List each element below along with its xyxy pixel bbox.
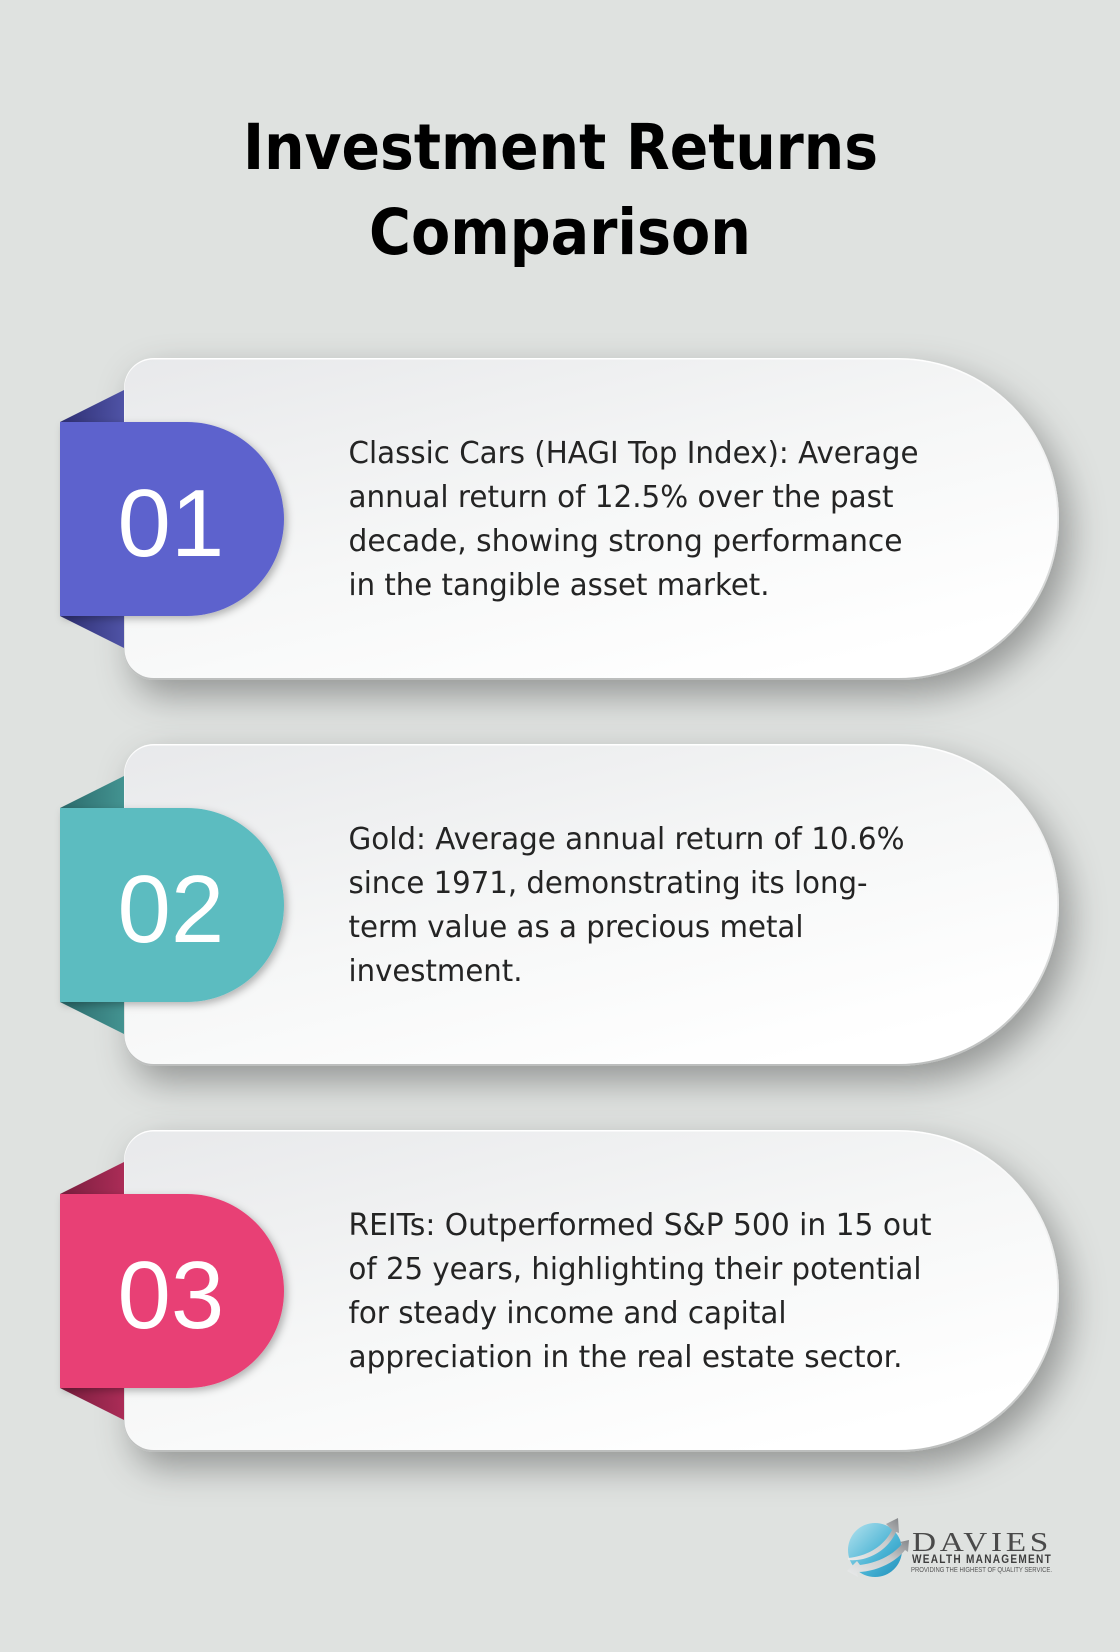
icon: globe with arrows	[847, 1518, 909, 1577]
panel: gold	[60, 744, 1059, 1066]
badge 1 ribbon folds	[60, 390, 124, 648]
text block 2: term value as a precious metal	[348, 910, 804, 945]
text block 2: since 1971, demonstrating its long-	[348, 866, 868, 901]
text block 3: REITs: Outperformed S&P 500 in 15 out	[348, 1208, 932, 1243]
panel: reits	[60, 1130, 1059, 1452]
text block 1: decade, showing strong performance	[348, 524, 902, 559]
title: Investment Returns	[243, 111, 878, 184]
text block 2: Gold: Average annual return of 10.6%	[348, 822, 904, 857]
badge 2 ribbon folds	[60, 776, 124, 1034]
text block 3: for steady income and capital	[348, 1296, 786, 1331]
text block 2: investment.	[348, 954, 522, 989]
text block 3: of 25 years, highlighting their potential	[348, 1252, 922, 1287]
badge 3	[60, 1194, 284, 1388]
number 03: 03	[118, 1242, 224, 1349]
badge 2	[60, 808, 284, 1002]
number 02: 02	[118, 856, 224, 963]
text block 1: annual return of 12.5% over the past	[348, 480, 894, 515]
text block 3	[348, 1208, 932, 1375]
title	[243, 111, 878, 269]
card 1 background	[124, 358, 1059, 680]
number 01: 01	[118, 470, 224, 577]
logo: Davies Wealth Management: DAVIES	[912, 1527, 1052, 1557]
text block 1	[348, 436, 918, 603]
logo: Davies Wealth Management: PROVIDING THE HIGHEST OF QUALITY SERVICE.	[911, 1567, 1052, 1574]
card 3 background	[124, 1130, 1059, 1452]
text block 1: Classic Cars (HAGI Top Index): Average	[348, 436, 918, 471]
title: Comparison	[369, 196, 751, 269]
text block 3: appreciation in the real estate sector.	[348, 1340, 902, 1375]
logo: Davies Wealth Management	[847, 1518, 1052, 1577]
badge 3 ribbon folds	[60, 1162, 124, 1420]
logo: Davies Wealth Management: WEALTH MANAGEMENT	[912, 1552, 1052, 1566]
text block 2	[348, 822, 904, 989]
badge 1	[60, 422, 284, 616]
card 2 background	[124, 744, 1059, 1066]
panel: classic cars	[60, 358, 1059, 680]
text block 1: in the tangible asset market.	[348, 568, 770, 603]
